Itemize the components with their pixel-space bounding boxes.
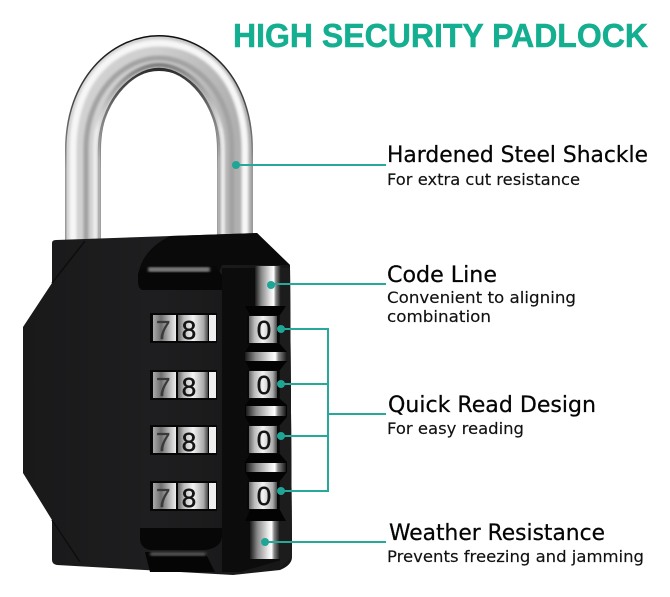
title: HIGH SECURITY PADLOCK: [233, 17, 648, 54]
lower groove: [140, 528, 222, 550]
right dial row 1: [247, 315, 279, 345]
callout: quick read design: [277, 325, 596, 495]
callout: hardened steel shackle: [232, 143, 648, 189]
left dial row 2: [150, 370, 217, 402]
callout: quick read design: Quick Read Design: [388, 393, 596, 418]
ridges between right dials: [245, 306, 287, 521]
left dial row 2: 8: [182, 372, 196, 402]
body right band: [222, 268, 292, 572]
left dial row 1: 7: [156, 315, 170, 345]
right dial row 4: 0: [257, 481, 271, 511]
right dial row 2: [247, 370, 279, 400]
left dial row 3: [150, 425, 217, 457]
callout: hardened steel shackle: Hardened Steel Shackle: [387, 143, 648, 168]
padlock shackle: [73, 43, 245, 242]
callout: code line: Code Line: [387, 263, 497, 288]
left dial row 4: [150, 481, 217, 513]
right dial row 3: [247, 425, 279, 455]
callout: code line: [267, 263, 576, 326]
left dial row 3: 7: [156, 427, 170, 457]
callout: weather resistance: Prevents freezing and jamming: [387, 547, 644, 566]
right dial row 2: 0: [257, 370, 271, 400]
padlock body: [23, 233, 292, 575]
callout: weather resistance: Weather Resistance: [389, 521, 605, 546]
bottom chrome strip: [250, 521, 280, 559]
callout: code line: combination: [387, 307, 491, 326]
left dial row 3: 8: [182, 427, 196, 457]
left dial row 4: 7: [156, 483, 170, 513]
left dial row 2: 7: [156, 372, 170, 402]
callout: hardened steel shackle: For extra cut resistance: [387, 170, 580, 189]
left dial row 1: [150, 313, 217, 345]
right dial row 1: 0: [257, 315, 271, 345]
top chrome strip: [255, 266, 281, 306]
right dial row 3: 0: [257, 425, 271, 455]
upper groove: [138, 266, 222, 290]
callout: quick read design: For easy reading: [387, 419, 524, 438]
left dial row 1: 8: [182, 315, 196, 345]
callout: weather resistance: [261, 521, 644, 566]
right dial row 4: [247, 481, 279, 511]
callout: code line: Convenient to aligning: [387, 288, 576, 307]
left dial row 4: 8: [182, 483, 196, 513]
icon: padlock illustration: [23, 43, 292, 575]
